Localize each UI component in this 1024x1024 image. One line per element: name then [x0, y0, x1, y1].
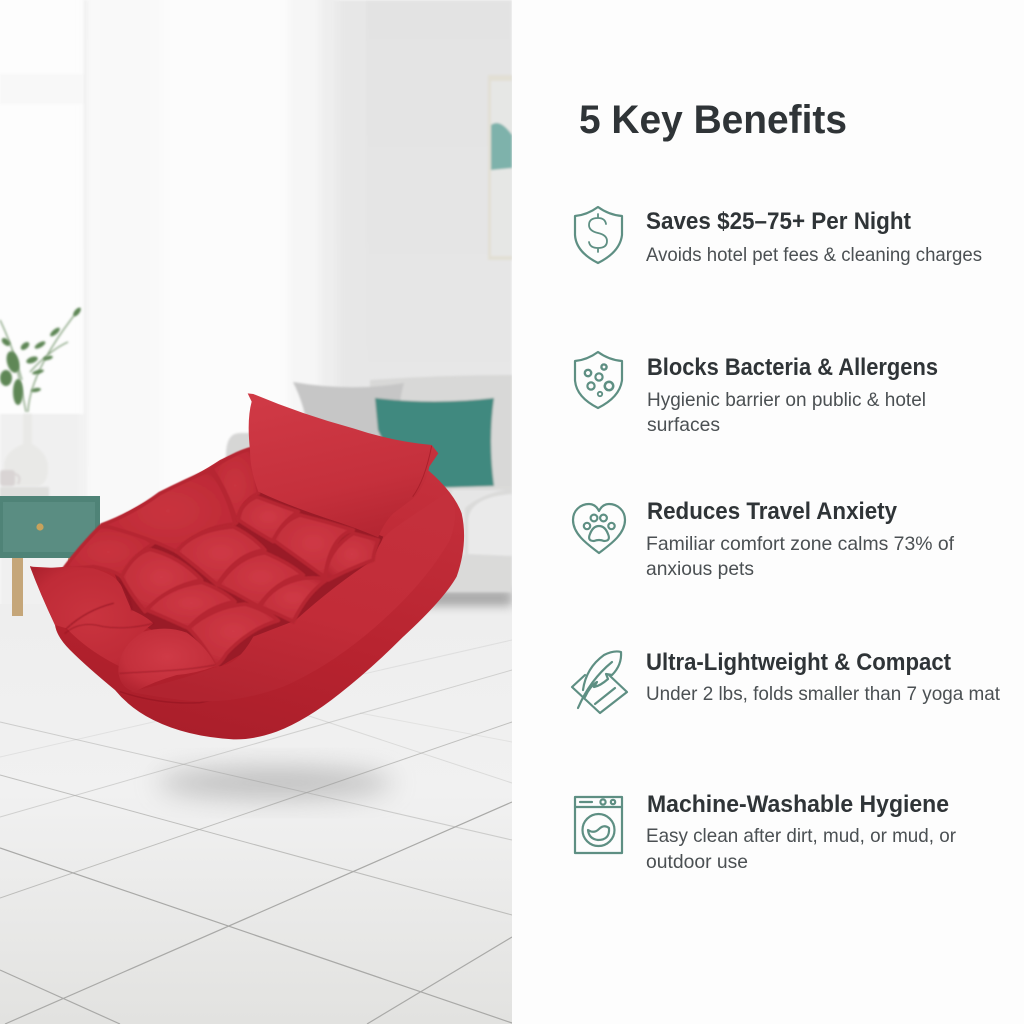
left bolster lumps: [63, 448, 258, 577]
teal side table: [0, 496, 100, 616]
back pillow seam: [413, 446, 432, 497]
description: Easy clean after dirt, mud, or mud, or: [646, 825, 956, 847]
lower seam shadow: [120, 550, 433, 703]
benefit 4: lightweight: [572, 649, 1001, 713]
description: Avoids hotel pet fees & cleaning charges: [646, 244, 982, 266]
description line 2: outdoor use: [646, 851, 748, 873]
heading: Machine-Washable Hygiene: [647, 791, 949, 818]
heading: Saves $25–75+ Per Night: [646, 208, 911, 235]
panel: room photo background: [0, 0, 512, 1024]
floating bed shadow: [157, 767, 393, 799]
back pillow: [248, 393, 438, 537]
product image: red tufted pet bed: [30, 393, 464, 739]
left corner flap: [30, 566, 153, 667]
heading: Reduces Travel Anxiety: [647, 498, 898, 525]
seat tufts: [122, 497, 378, 665]
framed wall art: [488, 75, 512, 260]
upper rim band: [130, 493, 455, 701]
teacup and book: [0, 470, 49, 498]
description: Familiar comfort zone calms 73% of: [646, 533, 955, 555]
panel: benefits list: [512, 0, 1024, 1024]
heading: Blocks Bacteria & Allergens: [647, 354, 938, 381]
sofa with cushions: [226, 375, 512, 592]
crease lines: [65, 582, 215, 673]
description: Under 2 lbs, folds smaller than 7 yoga mat: [646, 683, 1001, 705]
heading: Ultra-Lightweight & Compact: [646, 649, 951, 676]
bed outer shell: [30, 448, 464, 739]
icon: washing machine: [575, 797, 622, 853]
benefit 2: blocks bacteria: [575, 352, 938, 436]
description line 2: surfaces: [647, 414, 720, 436]
icon: heart with paw: [573, 504, 625, 553]
icon: feather on folded mat: [572, 651, 627, 713]
icon: shield with dollar sign: [575, 207, 622, 263]
icon: shield with germs: [575, 352, 622, 408]
benefit 1: saves money: [575, 207, 982, 266]
seat recess shade: [97, 473, 383, 667]
front corner cushion: [118, 629, 216, 692]
title: 5 Key Benefits: [579, 98, 847, 142]
description line 2: anxious pets: [646, 558, 754, 580]
description: Hygienic barrier on public & hotel: [647, 389, 926, 411]
tile floor with grout lines: [0, 590, 512, 1024]
room walls and window: [0, 0, 512, 640]
benefit 5: washable: [575, 791, 956, 873]
white curtains: [84, 0, 338, 610]
benefit 3: reduces anxiety: [573, 498, 955, 580]
potted plant in vase: [0, 307, 82, 486]
